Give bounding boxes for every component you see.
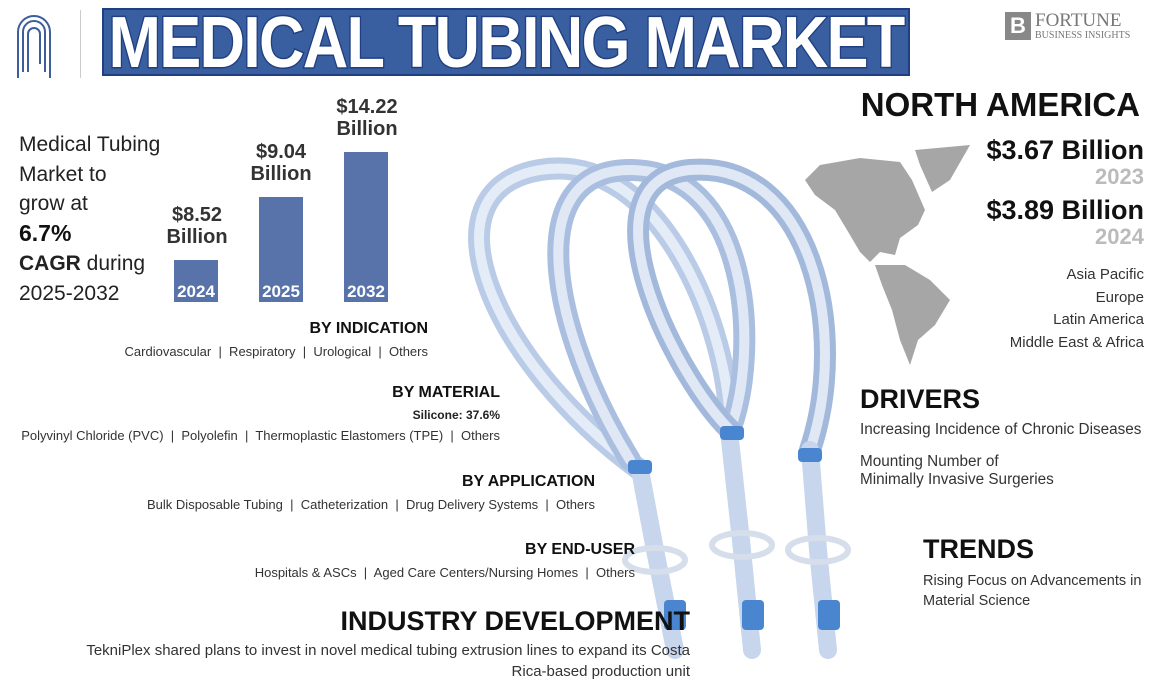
segment: by indication: BY INDICATION	[309, 320, 428, 337]
text: CAGR: grow at	[19, 192, 88, 215]
heading: North America: NORTH AMERICA	[861, 86, 1140, 123]
bar chart: Billion	[166, 226, 228, 248]
section: industry development: INDUSTRY DEVELOPMENT	[340, 606, 690, 636]
text: CAGR: Medical Tubing	[19, 133, 160, 156]
bar chart: $9.04	[256, 141, 306, 163]
segment: by application	[147, 473, 595, 512]
segment: by application: BY APPLICATION	[462, 473, 595, 490]
section: drivers: Minimally Invasive Surgeries	[860, 471, 1054, 488]
segment: by material: BY MATERIAL	[392, 384, 500, 401]
icon: tubing logo	[17, 15, 51, 78]
stats: North America values: 2024	[1095, 224, 1144, 249]
segment: by application: Bulk Disposable Tubing | Catheterization | Drug Delivery Systems | Others	[147, 497, 595, 512]
text: CAGR: 6.7%	[19, 220, 71, 246]
list: regions: Middle East & Africa	[1010, 334, 1144, 350]
bar chart: 2024	[177, 282, 215, 301]
bar chart: Billion	[336, 118, 398, 140]
segment: by material: Silicone: 37.6%	[413, 408, 500, 422]
list: regions: Latin America	[1053, 311, 1144, 328]
text: CAGR: CAGR during	[19, 252, 145, 275]
segment: by end-user	[255, 541, 635, 580]
stats: North America values: 2023	[1095, 164, 1144, 189]
stats: North America values	[986, 135, 1144, 249]
stats: North America values: $3.89 Billion	[986, 195, 1144, 225]
segment: by end-user: BY END-USER	[525, 541, 635, 558]
section: drivers: DRIVERS	[860, 384, 980, 414]
map: Americas	[805, 145, 970, 365]
bar chart: $14.22	[336, 96, 398, 118]
section: drivers: Increasing Incidence of Chronic Diseases	[860, 421, 1141, 438]
segment: by indication	[125, 320, 428, 359]
section: trends: Rising Focus on Advancements in Material Science	[923, 573, 1141, 609]
bar chart: 2032	[347, 282, 385, 301]
list: regions	[1010, 266, 1144, 350]
section: industry development: Rica-based production unit	[512, 663, 690, 680]
segment: by material	[21, 384, 500, 443]
bar chart	[166, 96, 398, 302]
text: CAGR: Market to	[19, 162, 107, 186]
section: drivers	[860, 384, 1141, 488]
bar chart: Billion	[250, 163, 312, 185]
section: industry development: TekniPlex shared plans to invest in novel medical tubing extrusion lines to expand its Costa	[86, 642, 690, 659]
section: trends	[923, 534, 1141, 609]
logo: Fortune Business Insights: FORTUNE	[1035, 10, 1121, 31]
list: regions: Europe	[1096, 288, 1144, 306]
list: regions: Asia Pacific	[1066, 266, 1144, 283]
logo: Fortune Business Insights	[1005, 10, 1130, 41]
stats: North America values: $3.67 Billion	[986, 135, 1144, 165]
segment: by material: Polyvinyl Chloride (PVC) | Polyolefin | Thermoplastic Elastomers (TPE) | Others	[21, 428, 500, 443]
text: CAGR: 2025-2032	[19, 282, 119, 304]
text: CAGR	[19, 133, 160, 304]
section: industry development	[86, 606, 690, 680]
section: drivers: Mounting Number of	[860, 453, 999, 470]
logo: Fortune Business Insights: B	[1010, 13, 1026, 38]
logo: Fortune Business Insights: BUSINESS INSIGHTS	[1035, 30, 1130, 41]
bar chart: $8.52	[172, 204, 222, 226]
bar chart: 2025	[262, 282, 300, 301]
image: medical tubes	[468, 157, 851, 659]
segment: by end-user: Hospitals & ASCs | Aged Care Centers/Nursing Homes | Others	[255, 565, 635, 580]
section: trends: TRENDS	[923, 534, 1034, 564]
segment: by indication: Cardiovascular | Respiratory | Urological | Others	[125, 344, 428, 359]
